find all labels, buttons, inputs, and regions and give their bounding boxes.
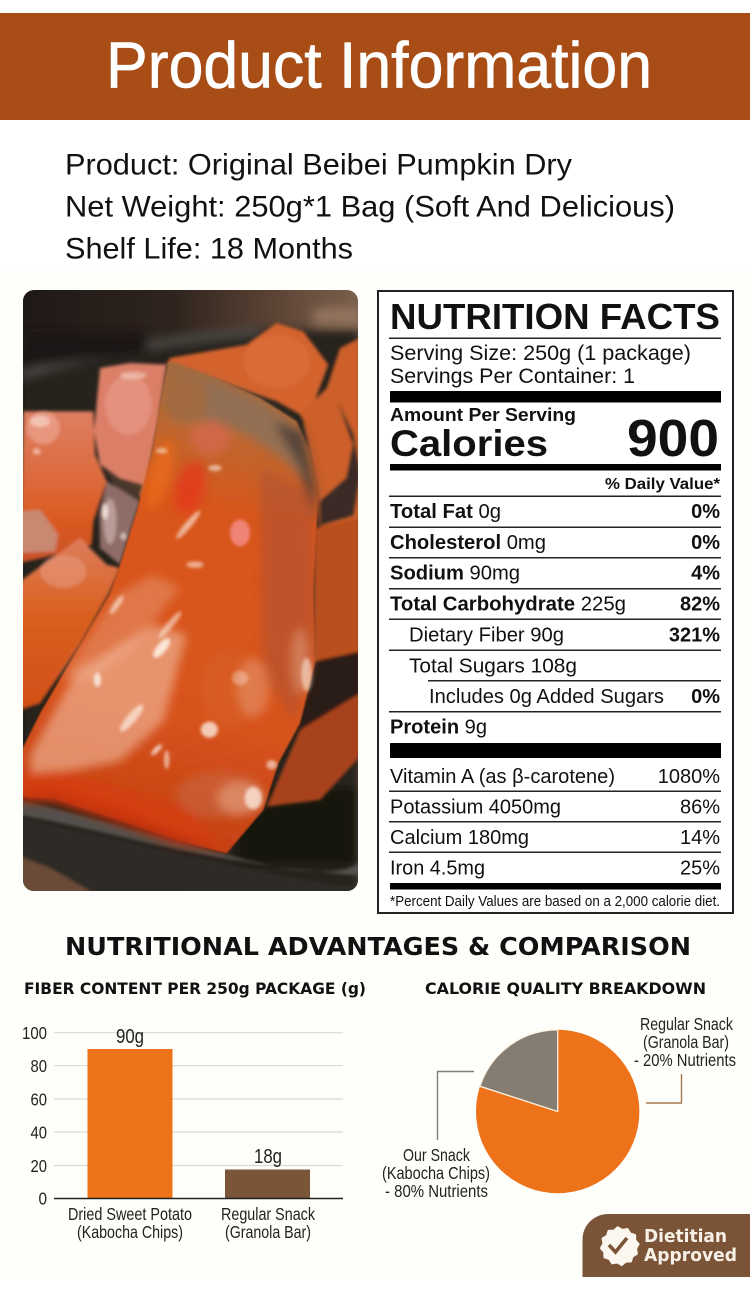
label: our snack 80%: Our Snack [403,1145,470,1165]
nutrient rows: 0% [691,532,720,554]
vitamins and minerals rows: 86% [680,796,720,818]
badge text: Dietitian [644,1227,727,1247]
leader line: our snack [438,1072,474,1140]
product details text block: Shelf Life: 18 Months [65,232,353,266]
y axis labels [22,1023,47,1208]
y axis labels: 60 [30,1090,47,1110]
badge text: Approved [644,1246,737,1266]
label: our snack 80% [382,1145,490,1201]
product details text block [65,148,675,266]
vitamins and minerals rows: Vitamin A (as β-carotene) [390,766,615,788]
y axis labels: 80 [30,1056,47,1076]
label: our snack 80%: - 80% Nutrients [385,1181,488,1201]
bar category labels: (Granola Bar) [225,1222,311,1242]
daily value header: % Daily Value* [605,476,721,493]
nutrient rows: Total Fat 0g [390,501,501,523]
main pumpkin piece [20,362,318,853]
calories block: 900 [627,410,719,468]
bar: dried sweet potato 90g: 90g [116,1026,144,1048]
nutrient rows: Total Carbohydrate 225g [390,594,626,616]
leader line: regular snack [646,1074,682,1103]
nutrient rows: Cholesterol 0mg [390,532,546,554]
calories block: Amount Per Serving [390,405,576,425]
calories block: Calories [390,422,548,464]
badge text [644,1227,737,1266]
product photo: glazed dried pumpkin on a dark plate [17,290,364,895]
vitamins and minerals rows: 25% [680,858,720,880]
bar category labels [68,1204,315,1242]
nutrient rows: Protein 9g [390,716,487,738]
vitamins and minerals rows: Calcium 180mg [390,827,529,849]
vitamins and minerals rows: Potassium 4050mg [390,796,561,818]
icon: seal with check mark [601,1227,639,1265]
nutrient rows: 321% [669,624,720,646]
title: Product Information [106,28,652,102]
y axis labels: 0 [38,1188,47,1208]
bar category labels: (Kabocha Chips) [77,1222,183,1242]
y axis labels: 20 [30,1156,47,1176]
bar category labels: Dried Sweet Potato [68,1204,192,1224]
nutrient rows: Dietary Fiber 90g [409,624,564,646]
y axis labels: 40 [30,1122,47,1142]
nutrient rows: Total Sugars 108g [409,656,577,678]
serving information: Serving Size: 250g (1 package) [390,342,691,365]
bar chart heading: FIBER CONTENT PER 250g PACKAGE (g) [24,979,366,998]
vitamins and minerals rows: Iron 4.5mg [390,858,485,880]
product details text block: Net Weight: 250g*1 Bag (Soft And Delicious) [65,190,675,224]
nutrition facts panel [378,291,733,913]
nutrient rows: 82% [680,594,720,616]
section heading: NUTRITIONAL ADVANTAGES & COMPARISON [65,932,691,961]
vitamins and minerals rows [390,766,720,880]
pie chart: calorie quality [382,979,736,1201]
vitamins and minerals rows: 14% [680,827,720,849]
nutrition heading: NUTRITION FACTS [390,296,720,337]
bar: regular snack 18g [225,1146,310,1198]
header banner [0,13,750,120]
label: regular snack 20% [634,1014,736,1070]
serving information: Servings Per Container: 1 [390,365,635,388]
label: regular snack 20%: (Granola Bar) [643,1032,729,1052]
y axis labels: 100 [22,1023,47,1043]
dietitian approved badge [582,1214,750,1277]
nutrient rows: 4% [691,562,720,584]
label: our snack 80%: (Kabocha Chips) [382,1163,490,1183]
bar chart: fiber content [22,979,366,1242]
pie chart heading: CALORIE QUALITY BREAKDOWN [425,979,706,998]
product details text block: Product: Original Beibei Pumpkin Dry [65,148,572,182]
bar category labels: Regular Snack [221,1204,315,1224]
nutrient rows: Sodium 90mg [390,562,520,584]
bar: dried sweet potato 90g [88,1026,172,1198]
serving information [390,342,691,388]
nutrient rows: Includes 0g Added Sugars [429,686,664,708]
footnote: *Percent Daily Values are based on a 2,000 calorie diet. [390,893,720,910]
vitamins and minerals rows: 1080% [658,766,720,788]
bar: regular snack 18g: 18g [254,1146,282,1168]
calories block [390,405,719,468]
nutrient rows: 0% [691,501,720,523]
nutrient rows: 0% [691,686,720,708]
nutrient rows [390,501,720,738]
